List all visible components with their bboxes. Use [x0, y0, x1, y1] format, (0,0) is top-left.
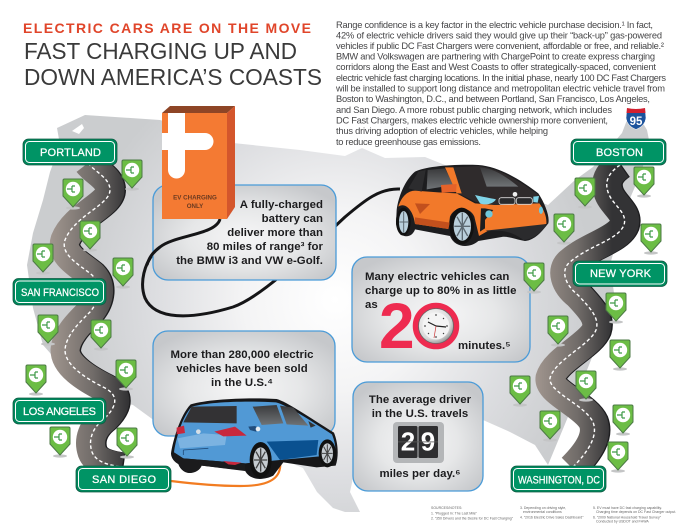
- battery range text: A fully-charged: [240, 199, 323, 211]
- sources and notes: 2. “350 Drivers and the Desire for DC Fast Charging”: [431, 516, 514, 520]
- station label: EV CHARGING: [173, 194, 217, 202]
- EVs sold text: [170, 349, 314, 389]
- orange charging cable: [171, 428, 280, 486]
- title line two: DOWN AMERICA’S COASTS: [24, 64, 322, 90]
- sign: Washington, DC: WASHINGTON, DC: [518, 474, 600, 486]
- icon: orange charging station: [162, 106, 235, 219]
- sign: Boston: [571, 139, 666, 165]
- sign: San Francisco: [13, 278, 106, 305]
- icon: I-95 highway shield: [626, 108, 646, 130]
- intro text block: thus driving adoption of electric vehicles, while helping: [336, 126, 548, 136]
- intro text block: to reduce greenhouse gas emissions.: [336, 137, 481, 147]
- intro text block: electric vehicle fast charging locations. In the initial phase, nearly 100 DC Fast Chargers: [336, 73, 666, 83]
- sign: Los Angeles: LOS ANGELES: [23, 406, 96, 418]
- daily miles text: in the U.S. travels: [372, 408, 468, 420]
- battery range text: 80 miles of range³ for: [207, 241, 324, 253]
- flip counter 29: [393, 422, 444, 463]
- title kicker: ELECTRIC CARS ARE ON THE MOVE: [23, 20, 311, 36]
- orange BMW i3 car: [396, 165, 549, 246]
- sources and notes: Charging time depends on DC Fast Charger output.: [596, 510, 676, 514]
- big number 2: 2: [379, 290, 415, 362]
- battery range text: the BMW i3 and VW e-Golf.: [176, 255, 323, 267]
- title line one: FAST CHARGING UP AND: [24, 38, 297, 64]
- intro text block: and San Diego. A more robust public charging network, which includes: [336, 105, 612, 115]
- panel: charge time: charge up to 80% in as little: [365, 285, 516, 297]
- icon: white plug cross: [162, 113, 214, 178]
- sign: Portland: PORTLAND: [40, 147, 101, 159]
- daily miles text: The average driver: [369, 394, 472, 406]
- charge time text: Many electric vehicles can: [365, 271, 509, 283]
- sign: Los Angeles: [13, 398, 106, 424]
- intro text block: BMW and Volkswagen are partnering with ChargePoint to create express charging: [336, 52, 655, 62]
- flip counter 29: 2: [401, 426, 415, 456]
- sources and notes: 5. EV must have DC fast charging capability.: [593, 506, 662, 510]
- sign: New York: NEW YORK: [590, 268, 652, 280]
- sources and notes: [431, 506, 676, 524]
- panel: battery range: [147, 185, 336, 280]
- station label: ONLY: [187, 203, 204, 210]
- intro text block: [335, 20, 666, 147]
- daily miles text: [369, 394, 472, 480]
- sign: Washington, DC: [511, 466, 606, 492]
- sign: San Diego: SAN DIEGO: [92, 474, 156, 486]
- sign: New York: [573, 261, 667, 286]
- sign: Portland: [23, 139, 117, 165]
- intro text block: corridors along the East and West Coasts to offer strategically-spaced, convenient: [336, 62, 656, 72]
- white notch: [72, 124, 84, 134]
- panel: US map background: [27, 115, 650, 512]
- intro text block: 42% of electric vehicle drivers said they would give up their “back-up” gas-powered: [336, 30, 662, 40]
- panel: charge time: as: [365, 299, 378, 311]
- east coast road: [550, 165, 626, 468]
- blue VW e-Golf car: [171, 398, 338, 479]
- sources and notes: 3. Depending on driving style,: [520, 506, 566, 510]
- daily miles text: miles per day.⁶: [379, 468, 461, 480]
- sources and notes: 6. “2009 National Household Travel Survey”: [593, 516, 662, 520]
- sign: San Diego: [76, 466, 171, 492]
- icon: I-95 highway shield: 95: [630, 116, 643, 128]
- sources and notes: environmental conditions: [523, 510, 562, 514]
- sources and notes: SOURCES/NOTES:: [431, 506, 462, 510]
- flip counter 29: 9: [421, 426, 435, 456]
- west coast road: [64, 163, 124, 467]
- EVs sold text: vehicles have been sold: [176, 363, 308, 375]
- sources and notes: 4. “2016 Electric Drive Sales Dashboard”: [520, 516, 584, 520]
- charging location pins: [26, 160, 661, 473]
- battery range text: [176, 199, 324, 267]
- intro text block: will be installed to support long distance and metropolitan electric vehicle travel from: [335, 84, 665, 94]
- intro text block: vehicles if public DC Fast Chargers were convenient, affordable or free, and reliable.²: [336, 41, 664, 51]
- panel: EVs sold: [153, 331, 335, 436]
- EVs sold text: More than 280,000 electric: [170, 349, 314, 361]
- sources and notes: Conducted by USDOT and FHWA: [596, 520, 649, 524]
- EVs sold text: in the U.S.⁴: [211, 377, 273, 389]
- intro text block: Range confidence is a key factor in the electric vehicle purchase decision.¹ In fact,: [336, 20, 653, 30]
- panel: charge time: [352, 257, 530, 362]
- sign: Boston: BOSTON: [596, 147, 643, 159]
- station label: [173, 194, 217, 210]
- intro text block: Boston to Washington, D.C., and between Portland, San Francisco, Los Angeles,: [336, 94, 650, 104]
- battery range text: battery can: [262, 213, 323, 225]
- charging cable to orange car: [143, 189, 400, 316]
- title: [23, 20, 322, 90]
- icon: clock zero: [416, 306, 456, 346]
- sign: San Francisco: SAN FRANCISCO: [21, 287, 99, 299]
- cable segment over panel: [147, 219, 220, 265]
- intro text block: DC Fast Chargers, makes electric vehicle ownership more convenient,: [336, 116, 608, 126]
- panel: charge time: minutes.⁵: [458, 340, 511, 352]
- battery range text: deliver more than: [227, 227, 323, 239]
- sources and notes: 1. “Plugged In: The Last Mile”: [431, 512, 478, 516]
- panel: daily miles: [353, 382, 483, 491]
